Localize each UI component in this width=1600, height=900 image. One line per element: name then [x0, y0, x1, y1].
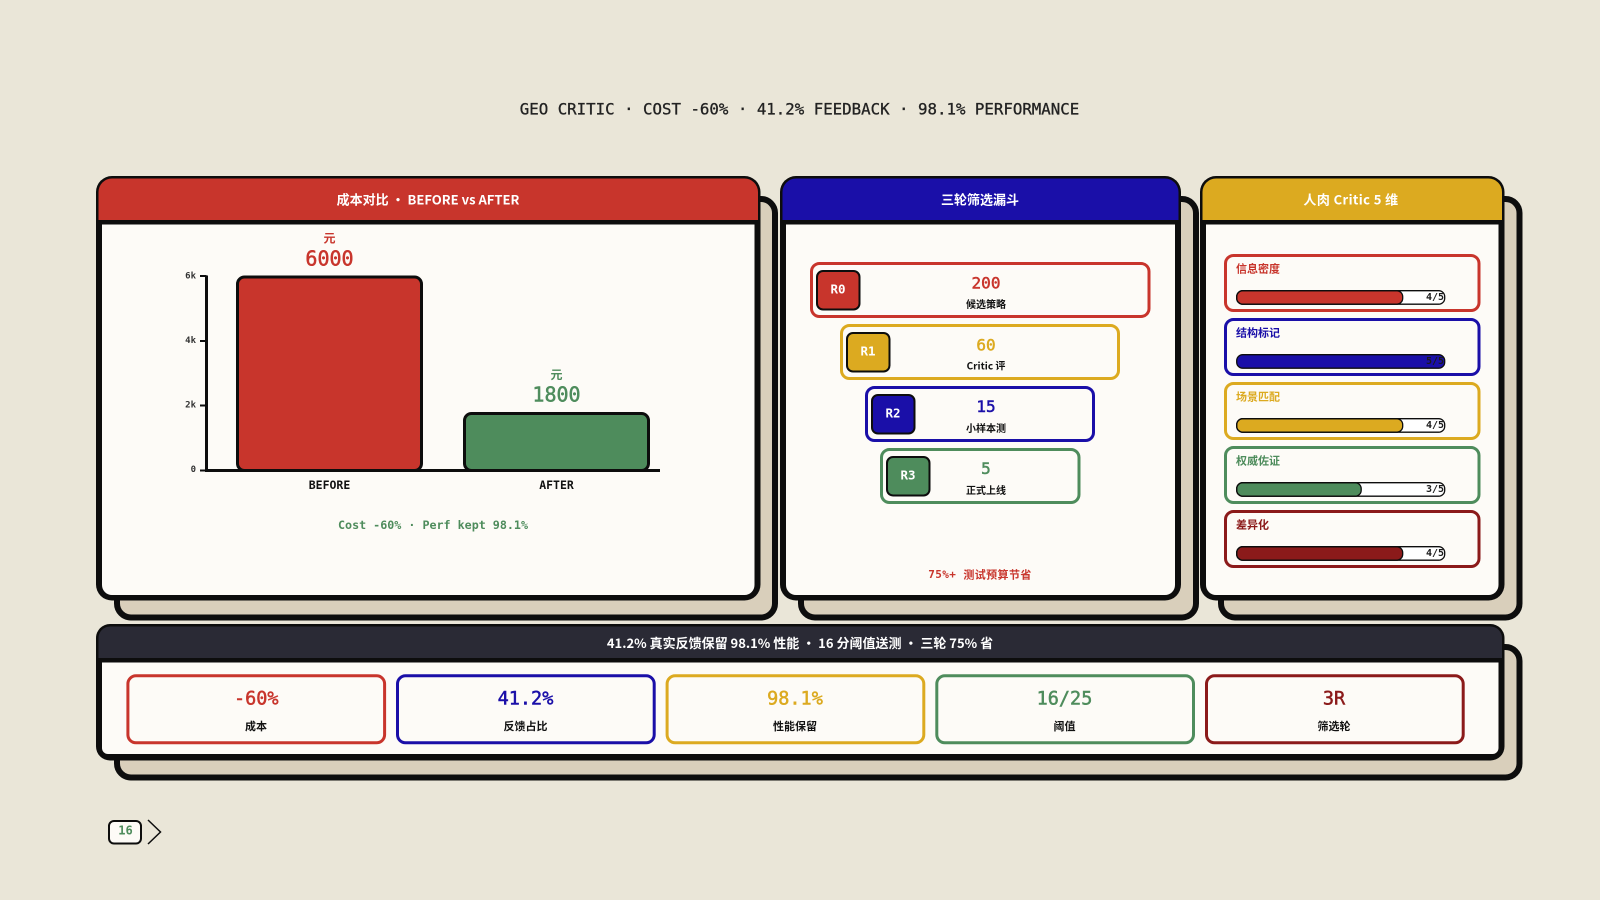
- KPI card: feedback share: [398, 676, 654, 743]
- panel: three-round funnel: [780, 176, 1196, 618]
- KPI card: feedback share: 41.2%: [498, 688, 553, 710]
- funnel row R0: R0: [830, 282, 846, 296]
- bar chart: [185, 230, 660, 492]
- funnel row R2: R2: [885, 406, 901, 420]
- KPI card: performance kept: 性能保留: [773, 718, 817, 734]
- dimension card: 权威佐证: [1226, 448, 1479, 502]
- funnel row R2: [866, 388, 1094, 440]
- KPI card: rounds: 3R: [1323, 688, 1346, 710]
- panel: cost comparison: [96, 176, 775, 618]
- dimension card: 结构标记: 结构标记: [1236, 324, 1280, 340]
- heading: cost comparison: 成本对比 · BEFORE vs AFTER: [337, 190, 520, 208]
- chart axes: [206, 276, 660, 470]
- funnel note: 75%+ 测试预算节省: [928, 566, 1032, 582]
- page number badge: [109, 821, 141, 844]
- funnel row R1: 60: [976, 336, 996, 354]
- axis tick labels: 2k: [185, 400, 197, 410]
- KPI card: cost: 成本: [245, 718, 267, 734]
- heading: summary: 41.2% 真实反馈保留 98.1% 性能 · 16 分阈值送测 · 三轮 75% 省: [607, 633, 993, 652]
- value label: after: 元: [550, 366, 563, 383]
- axis tick labels: [185, 272, 197, 475]
- KPI card: performance kept: [667, 676, 924, 743]
- chart caption: Cost -60% · Perf kept 98.1%: [338, 518, 528, 532]
- funnel row R3: R3: [900, 468, 916, 482]
- KPI card: threshold: [937, 676, 1194, 743]
- dimension card: 结构标记: 5/5: [1426, 356, 1444, 367]
- heading: critic dimensions: 人肉 Critic 5 维: [1303, 190, 1399, 208]
- axis tick labels: 0: [191, 465, 196, 475]
- panel: human critic five dimensions: [1200, 176, 1520, 618]
- KPI card: rounds: 筛选轮: [1318, 718, 1350, 734]
- bar: before: [238, 277, 422, 470]
- category label: before: BEFORE: [309, 478, 350, 492]
- funnel row R1: Critic 评: [967, 358, 1005, 372]
- value label: before: 6000: [305, 246, 354, 270]
- funnel row R1: [842, 326, 1118, 378]
- dimension card: 场景匹配: 4/5: [1426, 420, 1444, 431]
- dimension card: 差异化: 差异化: [1236, 516, 1269, 532]
- KPI card: cost: [128, 676, 385, 743]
- dimension card: 信息密度: 信息密度: [1236, 260, 1280, 276]
- category label: after: AFTER: [539, 478, 574, 492]
- dimension card: 差异化: [1226, 512, 1479, 566]
- dimension card: 场景匹配: 场景匹配: [1236, 388, 1280, 404]
- value label: before: 元: [323, 230, 336, 246]
- KPI card: threshold: 阈值: [1054, 718, 1076, 734]
- dimension card: 结构标记: [1226, 320, 1479, 374]
- funnel row R2: 15: [976, 397, 996, 416]
- panel: summary KPIs: [96, 624, 1520, 778]
- dimension card: 权威佐证: 3/5: [1426, 484, 1444, 495]
- funnel row R1: R1: [860, 344, 876, 358]
- funnel row R3: 5: [981, 459, 991, 478]
- dimension card: 场景匹配: [1226, 384, 1479, 438]
- bar: after: [464, 414, 648, 470]
- funnel row R3: [882, 450, 1079, 502]
- page number badge: 16: [118, 824, 133, 838]
- funnel row R0: 200: [972, 274, 1000, 292]
- funnel row R0: 候选策略: [966, 296, 1006, 311]
- dimension card: 差异化: 4/5: [1426, 548, 1444, 559]
- dimension card: 信息密度: [1226, 256, 1479, 310]
- funnel row R2: 小样本测: [966, 420, 1006, 435]
- funnel row R3: 正式上线: [966, 482, 1006, 497]
- KPI card: threshold: 16/25: [1037, 688, 1092, 710]
- value label: before: [305, 230, 354, 270]
- axis tick labels: 4k: [185, 336, 197, 346]
- funnel row R0: [812, 264, 1149, 316]
- dimension card: 权威佐证: 权威佐证: [1236, 452, 1280, 468]
- axis tick labels: 6k: [185, 272, 197, 282]
- title: GEO CRITIC · COST -60% · 41.2% FEEDBACK · 98.1% PERFORMANCE: [520, 100, 1079, 118]
- KPI card: cost: -60%: [234, 688, 279, 710]
- KPI card: rounds: [1206, 676, 1463, 743]
- KPI card: performance kept: 98.1%: [767, 688, 823, 710]
- heading: funnel: 三轮筛选漏斗: [941, 190, 1019, 208]
- dimension card: 信息密度: 4/5: [1426, 292, 1444, 303]
- arrow: next page: [148, 820, 160, 844]
- KPI card: feedback share: 反馈占比: [504, 718, 548, 734]
- value label: after: 1800: [532, 382, 581, 406]
- value label: after: [532, 366, 581, 406]
